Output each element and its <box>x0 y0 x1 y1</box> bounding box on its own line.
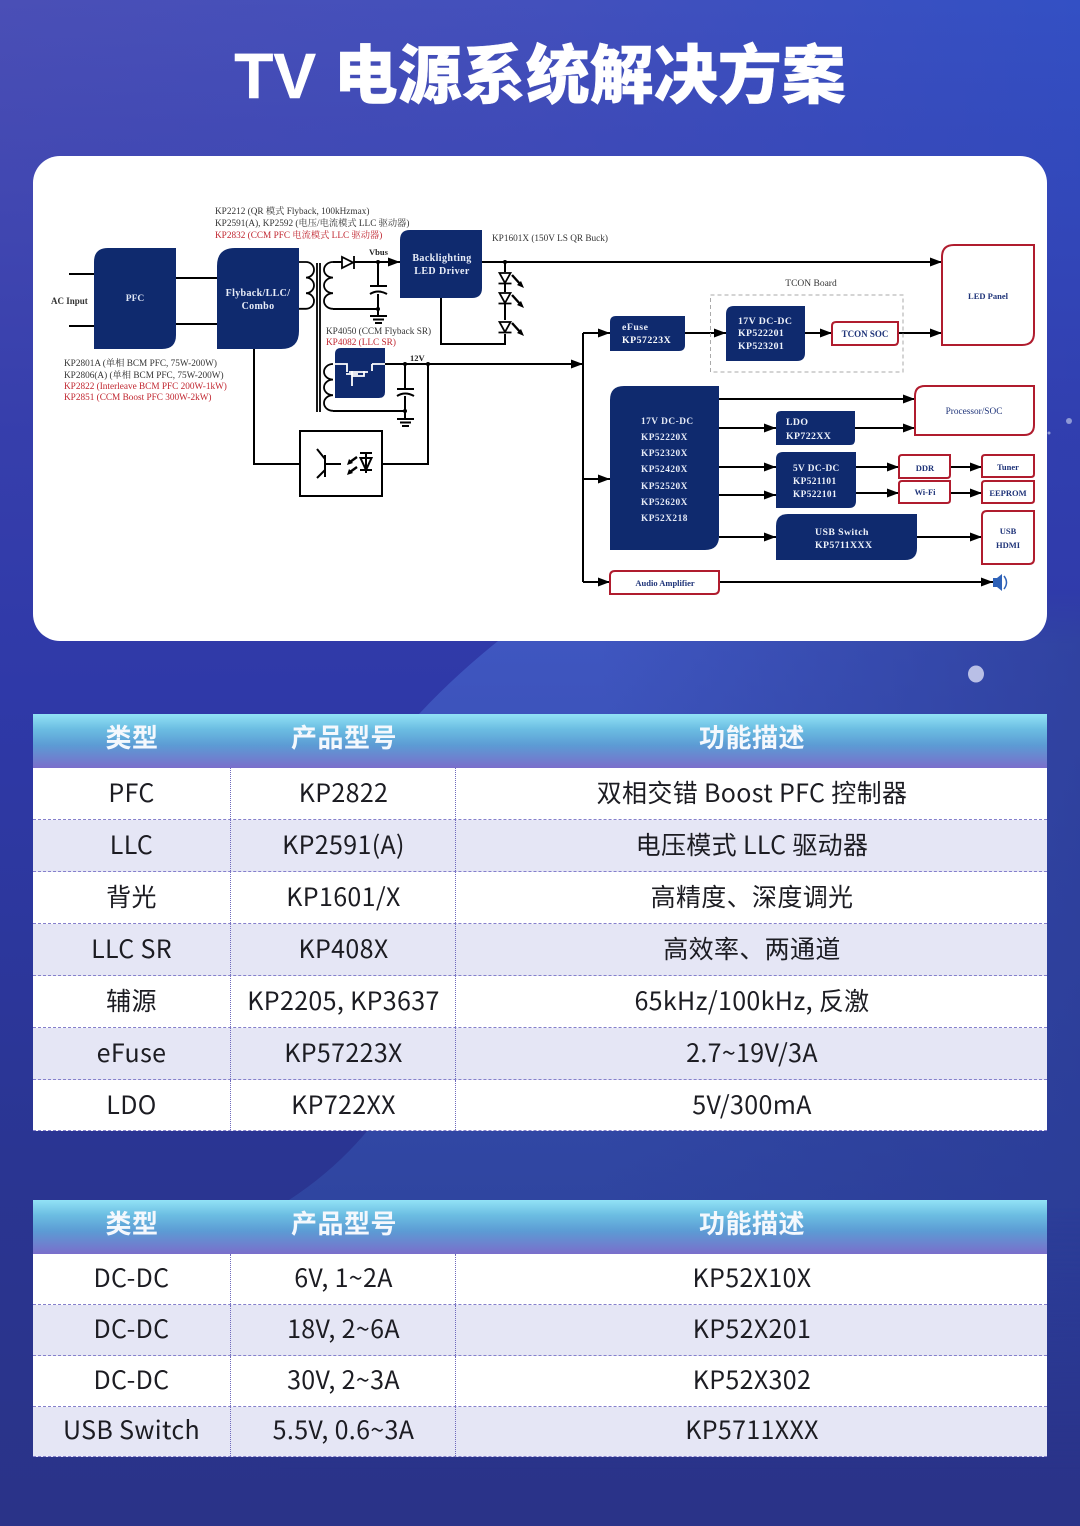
label: PFC part list <box>64 357 227 403</box>
block: 17V DC-DC main: KP52220X <box>641 433 688 443</box>
row: eFuse <box>33 1028 1047 1080</box>
row: LLC SR: KP408X <box>298 930 389 966</box>
block: 17V DC-DC main: KP52420X <box>641 465 688 475</box>
block: 17V DC-DC main: KP52520X <box>641 482 688 492</box>
row: LDO <box>33 1080 1047 1131</box>
block: Backlighting LED Driver: Backlighting <box>412 253 472 264</box>
row: backlight: 背光 <box>106 878 157 914</box>
block: 17V DC-DC main: KP52X218 <box>641 514 688 524</box>
target: Tuner: Tuner <box>997 462 1019 472</box>
panel: system block diagram card <box>33 156 1047 641</box>
target: LED Panel: LED Panel <box>968 291 1009 301</box>
row: LLC: 电压模式 LLC 驱动器 <box>636 826 868 862</box>
label: PFC part list: KP2806(A) (单相 BCM PFC, 75W-200W) <box>64 369 224 381</box>
block: USB Switch: USB Switch <box>815 527 869 538</box>
row: LLC SR: LLC SR <box>91 930 172 966</box>
block: SR MOSFET <box>335 348 385 398</box>
row: DC-DC 6V: DC-DC <box>93 1258 170 1294</box>
table 1: power parts <box>33 714 1047 1131</box>
target: USB HDMI <box>982 511 1034 564</box>
table 2 header <box>33 1200 1047 1254</box>
target: Wi-Fi: Wi-Fi <box>914 487 936 497</box>
row: auxiliary <box>33 976 1047 1028</box>
row: LLC SR <box>33 924 1047 976</box>
row: eFuse: 2.7~19V/3A <box>686 1034 818 1070</box>
label: Flyback/LLC part list: KP2832 (CCM PFC 电流模式 LLC 驱动器) <box>215 229 382 241</box>
block: Flyback/LLC/Combo <box>217 248 299 349</box>
icon: transformer <box>299 262 333 412</box>
target: Processor/SOC: Processor/SOC <box>946 407 1002 417</box>
block diagram <box>51 205 1035 595</box>
row: PFC: PFC <box>108 774 155 810</box>
row: DC-DC 30V: DC-DC <box>93 1360 170 1396</box>
row: DC-DC 6V <box>33 1254 1047 1305</box>
row: LDO: 5V/300mA <box>692 1086 812 1122</box>
target: Processor/SOC <box>915 386 1034 435</box>
block: Flyback/LLC/Combo: Combo <box>242 301 274 312</box>
label: Flyback/LLC part list: KP2591(A), KP2592 (电压/电流模式 LLC 驱动器) <box>215 217 410 229</box>
label: PFC part list: KP2822 (Interleave BCM PFC 200W-1kW) <box>64 382 227 392</box>
target: TCON SOC: TCON SOC <box>842 329 888 339</box>
block: 17V DC-DC main: KP52620X <box>641 498 688 508</box>
block: TCON 17V DC-DC <box>726 306 805 361</box>
row: LLC <box>33 820 1047 872</box>
block: 5V DC-DC: 5V DC-DC <box>793 464 840 474</box>
block: 17V DC-DC main: 17V DC-DC <box>641 417 694 427</box>
row: DC-DC 6V: KP52X10X <box>693 1258 811 1294</box>
row: backlight: KP1601/X <box>286 878 401 914</box>
target: Audio Amplifier <box>610 571 719 594</box>
row: DC-DC 18V: DC-DC <box>93 1310 170 1346</box>
icon: LED string <box>498 273 524 336</box>
row: auxiliary: 65kHz/100kHz, 反激 <box>634 982 870 1018</box>
row: DC-DC 30V: KP52X302 <box>693 1360 811 1396</box>
block: eFuse: KP57223X <box>622 335 671 346</box>
row: PFC: 双相交错 Boost PFC 控制器 <box>597 774 907 810</box>
block: PFC <box>94 248 176 349</box>
block: eFuse: eFuse <box>622 322 649 333</box>
block: eFuse <box>610 316 685 351</box>
block: USB Switch: KP5711XXX <box>815 540 872 551</box>
label: TCON Board with dashed boundary <box>710 279 903 372</box>
label: SR part list: KP4082 (LLC SR) <box>326 338 396 348</box>
row: USB Switch: USB Switch <box>63 1411 200 1447</box>
row: DC-DC 6V: 6V, 1~2A <box>294 1258 393 1294</box>
table 1 header: 产品型号 <box>291 718 397 755</box>
row: LLC: LLC <box>110 826 153 862</box>
row: PFC <box>33 768 1047 820</box>
label: AC Input: AC Input <box>51 296 88 306</box>
target: LED Panel <box>942 245 1034 345</box>
table 1 header <box>33 714 1047 768</box>
junction dots <box>376 260 507 413</box>
block: TCON 17V DC-DC: KP523201 <box>738 341 784 352</box>
target: USB HDMI: HDMI <box>996 540 1021 550</box>
target: USB HDMI: USB <box>1000 526 1017 536</box>
icon: rectifier diode <box>342 256 354 269</box>
block: 5V DC-DC <box>776 452 856 508</box>
row: LDO: LDO <box>106 1086 157 1122</box>
block: Backlighting LED Driver: LED Driver <box>414 266 470 277</box>
label: PFC part list: KP2851 (CCM Boost PFC 300W-2kW) <box>64 393 212 403</box>
target: Wi-Fi <box>899 481 950 503</box>
row: LLC: KP2591(A) <box>282 826 405 862</box>
block: TCON 17V DC-DC: 17V DC-DC <box>738 316 792 327</box>
table 1 header: 类型 <box>105 718 158 755</box>
block: Flyback/LLC/Combo: Flyback/LLC/ <box>226 288 290 299</box>
table 2 header: 产品型号 <box>291 1204 397 1241</box>
label: 12V: 12V <box>410 353 426 363</box>
table 2: DC-DC parts <box>33 1200 1047 1457</box>
table 1 header: 功能描述 <box>699 718 805 755</box>
block: LDO: KP722XX <box>786 431 831 442</box>
icon: capacitors and grounds <box>370 286 414 426</box>
icon: optocoupler <box>300 431 382 496</box>
label: Flyback/LLC part list <box>215 205 410 241</box>
row: DC-DC 30V <box>33 1356 1047 1407</box>
target: DDR: DDR <box>916 463 935 473</box>
row: USB Switch: 5.5V, 0.6~3A <box>273 1411 414 1447</box>
block: TCON 17V DC-DC: KP522201 <box>738 328 784 339</box>
label: Vbus: Vbus <box>369 247 389 257</box>
block: PFC: PFC <box>126 294 144 304</box>
row: PFC: KP2822 <box>299 774 388 810</box>
block: USB Switch <box>776 514 917 560</box>
row: DC-DC 18V: 18V, 2~6A <box>287 1310 400 1346</box>
row: LLC SR: 高效率、两通道 <box>663 930 841 966</box>
title: TV 电源系统解决方案 <box>234 40 846 112</box>
row: backlight: 高精度、深度调光 <box>651 878 853 914</box>
row: auxiliary: 辅源 <box>106 982 157 1018</box>
target: DDR <box>899 455 950 478</box>
block: 17V DC-DC main <box>610 386 719 550</box>
row: DC-DC 18V: KP52X201 <box>693 1310 811 1346</box>
row: USB Switch <box>33 1407 1047 1457</box>
row: eFuse: eFuse <box>97 1034 166 1070</box>
block: Backlighting LED Driver <box>400 230 482 298</box>
block: LDO: LDO <box>786 417 808 428</box>
table 2 header: 功能描述 <box>699 1204 805 1241</box>
row: backlight <box>33 872 1047 924</box>
target: EEPROM <box>982 481 1034 503</box>
row: USB Switch: KP5711XXX <box>685 1411 819 1447</box>
block: LDO <box>776 411 855 445</box>
row: auxiliary: KP2205, KP3637 <box>247 982 440 1018</box>
label: Flyback/LLC part list: KP2212 (QR 模式 Flyback, 100kHzmax) <box>215 205 369 217</box>
label: SR part list: KP4050 (CCM Flyback SR) <box>326 327 431 337</box>
block: 17V DC-DC main: KP52320X <box>641 449 688 459</box>
row: eFuse: KP57223X <box>284 1034 403 1070</box>
label: PFC part list: KP2801A (单相 BCM PFC, 75W-200W) <box>64 357 217 369</box>
row: DC-DC 30V: 30V, 2~3A <box>287 1360 400 1396</box>
target: EEPROM: EEPROM <box>989 488 1027 498</box>
target: Audio Amplifier: Audio Amplifier <box>635 578 695 588</box>
wires <box>69 262 993 582</box>
row: DC-DC 18V <box>33 1305 1047 1356</box>
row: LDO: KP722XX <box>291 1086 396 1122</box>
label: SR part list <box>326 327 431 348</box>
block: 5V DC-DC: KP521101 <box>793 477 836 487</box>
label: KP1601X: KP1601X (150V LS QR Buck) <box>492 234 608 244</box>
icon: speaker <box>993 574 1006 591</box>
block: 5V DC-DC: KP522101 <box>793 490 837 500</box>
label: TCON Board with dashed boundary: TCON Board <box>785 279 837 289</box>
target: TCON SOC <box>832 322 898 345</box>
target: Tuner <box>982 455 1034 477</box>
table 2 header: 类型 <box>105 1204 158 1241</box>
